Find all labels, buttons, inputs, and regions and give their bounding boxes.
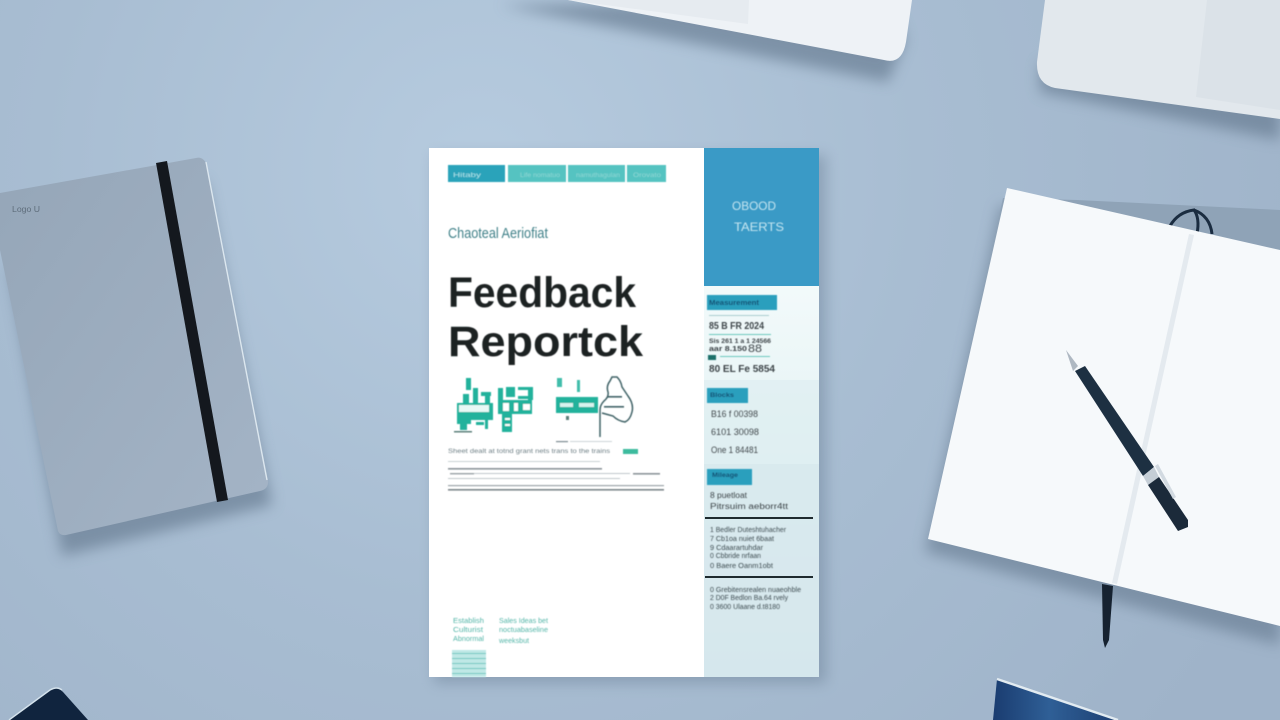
sidebar numbered list 2: 0 3600 Ulaane d.t8180 (710, 604, 780, 611)
sidebar numbered list 1: 7 Cb1oa nuiet 6baat (710, 536, 774, 543)
blue header block: OBOOD (732, 199, 776, 213)
sidebar section 1: 85 B FR 2024 (709, 321, 764, 332)
bottom right device (993, 679, 1118, 720)
sidebar section 1: 88 (748, 343, 762, 355)
report document (429, 148, 826, 683)
sidebar section 2: B16 f 00398 (711, 409, 758, 419)
notebook white edge (206, 162, 267, 480)
top laptop (500, 0, 912, 82)
navigation tabs: Hitaby (453, 173, 481, 179)
right notebook (925, 188, 1280, 648)
title (448, 269, 643, 366)
sidebar numbered list 1: 1 Bedler Duteshtuhacher (710, 527, 787, 534)
sidebar numbered list 1 (710, 527, 787, 570)
notebook spine fold (1112, 234, 1194, 584)
sidebar numbered list 2 (710, 587, 801, 611)
navigation tabs: Orovato (633, 173, 662, 179)
sidebar section 2: Blocks (710, 393, 735, 399)
sidebar numbered list 2: 2 D0F Bedlon Ba.64 rvely (710, 595, 788, 602)
title: Feedback (448, 269, 636, 317)
navigation tabs (448, 165, 666, 182)
sidebar numbered list 2: 0 Grebitensrealen nuaeohble (710, 587, 801, 594)
sidebar section 1: Sis 261 1 a 1 24566 (709, 339, 772, 345)
sidebar section 3: 8 puetloat (710, 491, 748, 500)
subtitle: Chaoteal Aeriofiat (448, 225, 549, 242)
sidebar section 1: Measurement (709, 300, 760, 307)
footer text: teal columns: weeksbut (498, 638, 529, 645)
sidebar section 1: aar 8.150 (709, 346, 747, 353)
sidebar section 3 (707, 469, 789, 511)
teal diagram: left (454, 378, 533, 432)
bottom left device (9, 688, 88, 720)
sidebar panel (704, 148, 819, 677)
notebook elastic loop (1170, 210, 1212, 234)
sidebar numbered list 1: 0 Baere Oanm1obt (710, 563, 773, 570)
sidebar section 2: 6101 30098 (711, 427, 759, 437)
footer text: teal columns: Establish (453, 618, 484, 625)
sidebar list divider (705, 576, 813, 578)
footer text: teal columns: Culturist (453, 627, 483, 634)
top right laptop (1037, 0, 1280, 140)
notebook label: Logo U (12, 205, 40, 214)
blue header block (704, 148, 819, 286)
blue header block: TAERTS (734, 220, 784, 234)
sidebar section 1: 80 EL Fe 5854 (709, 364, 775, 375)
sidebar section 1 (707, 295, 777, 375)
footer text: teal columns: Sales Ideas bet (499, 618, 548, 625)
sidebar numbered list 1: 9 Cdaarartuhdar (710, 545, 764, 552)
navigation tabs: namuthagulan (576, 173, 620, 179)
footer text: teal columns: noctuabaseline (499, 627, 548, 634)
ribbon bookmark (1102, 584, 1113, 648)
left notebook (0, 158, 272, 556)
navigation tabs: Life nomatuo (520, 173, 561, 179)
body text lines: Sheet dealt at totnd grant nets trans to the trains (448, 448, 611, 455)
sidebar section 3: Pitrsuim aeborr4tt (710, 502, 789, 511)
pen (1066, 350, 1188, 531)
footer text: teal columns: Abnormal (453, 636, 484, 643)
sidebar section 3: Mileage (712, 473, 739, 479)
sidebar section 2: One 1 84481 (711, 445, 758, 455)
teal diagram: right (556, 377, 632, 442)
sidebar section 2 (707, 388, 759, 455)
footer text: teal columns (453, 618, 548, 645)
footer striped block (452, 650, 486, 677)
body text lines (448, 448, 664, 491)
sidebar list divider (705, 517, 813, 519)
sidebar numbered list 1: 0 Cbbride nrfaan (710, 553, 761, 560)
title: Reportck (448, 318, 643, 366)
notebook elastic band (156, 161, 228, 502)
